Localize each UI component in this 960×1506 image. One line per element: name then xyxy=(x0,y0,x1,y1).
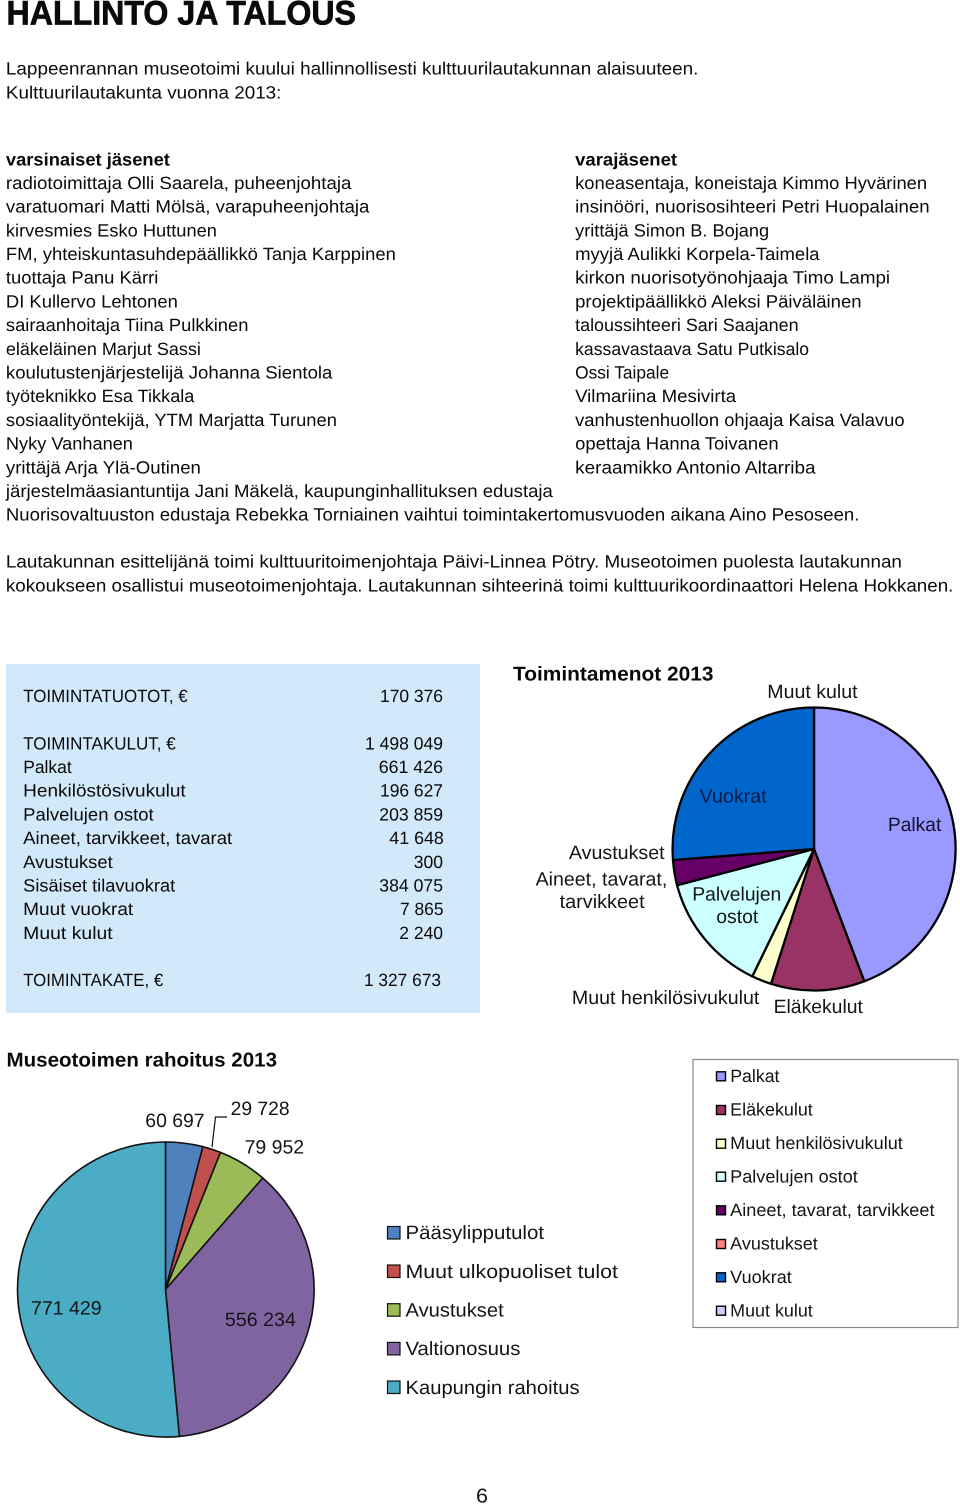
slice: Palkat xyxy=(814,707,956,981)
legend: Museotoimen rahoitus: Muut ulkopuoliset tulot xyxy=(406,1262,619,1283)
panel: financial table: Aineet, tarvikkeet, tavarat xyxy=(23,828,232,848)
pie chart labels: Toimintamenot: tarvikkeet xyxy=(560,892,645,913)
pie chart labels: Museotoimen rahoitus: 60 697 xyxy=(145,1111,205,1132)
slice: Pääsylipputulot xyxy=(166,1142,203,1290)
pie chart labels: Toimintamenot: Palvelujen xyxy=(692,885,781,906)
pie chart labels: Museotoimen rahoitus xyxy=(31,1099,304,1331)
panel: financial table: TOIMINTAKATE, € xyxy=(23,970,163,990)
panel: financial table: 384 075 xyxy=(379,876,443,896)
heading: varajäsenet: varajäsenet xyxy=(575,149,677,169)
text block: presenters: Lautakunnan esittelijänä toimi kulttuuritoimenjohtaja Päivi-Linnea Pötry. Museotoimen puolesta lautakunnan xyxy=(6,552,902,572)
members list: varsinaiset jäsenet: eläkeläinen Marjut Sassi xyxy=(6,339,201,359)
pie chart labels: Toimintamenot: Eläkekulut xyxy=(774,997,864,1018)
panel: financial table: 41 648 xyxy=(389,828,444,848)
intro text: Lappeenrannan museotoimi kuului hallinnollisesti kulttuurilautakunnan alaisuuteen. xyxy=(6,59,698,79)
members list: varsinaiset jäsenet: sairaanhoitaja Tiina Pulkkinen xyxy=(6,315,248,335)
slice: Muut ulkopuoliset tulot xyxy=(166,1147,220,1290)
members list: varsinaiset jäsenet: radiotoimittaja Olli Saarela, puheenjohtaja xyxy=(6,173,352,193)
slice: Palvelujen ostot xyxy=(677,849,814,976)
panel: financial table: Palkat xyxy=(23,757,72,777)
pie chart labels: Toimintamenot xyxy=(536,682,942,1018)
members list: varajäsenet: Ossi Taipale xyxy=(575,362,669,382)
panel: financial table: 2 240 xyxy=(399,923,443,943)
pie chart labels: Museotoimen rahoitus: 79 952 xyxy=(245,1138,304,1158)
members list: varajäsenet: Vilmariina Mesivirta xyxy=(575,386,736,406)
members list: varsinaiset jäsenet: DI Kullervo Lehtonen xyxy=(6,291,178,311)
members list: varajäsenet: koneasentaja, koneistaja Kimmo Hyvärinen xyxy=(575,173,927,193)
members list: varajäsenet xyxy=(575,149,930,477)
legend: Toimintamenot: Eläkekulut xyxy=(730,1099,813,1119)
slice: Eläkekulut xyxy=(771,849,864,991)
intro text xyxy=(6,59,698,102)
slice: Valtionosuus xyxy=(166,1178,314,1436)
heading: Museotoimen rahoitus 2013: Museotoimen rahoitus 2013 xyxy=(6,1049,277,1071)
pie chart labels: Toimintamenot: Palkat xyxy=(888,815,942,836)
slice: Kaupungin rahoitus xyxy=(18,1142,179,1437)
pie chart labels: Museotoimen rahoitus: 771 429 xyxy=(31,1298,102,1320)
panel: financial table: 661 426 xyxy=(379,757,443,777)
legend: Museotoimen rahoitus: Avustukset xyxy=(406,1300,504,1322)
slice: Muut henkilösivukulut xyxy=(752,849,814,984)
panel: financial table: TOIMINTATUOTOT, € xyxy=(23,686,188,706)
leader line: 29 728 xyxy=(212,1117,227,1147)
slice: Aineet, tavarat, tarvikkeet xyxy=(673,849,814,885)
legend: Toimintamenot: Avustukset xyxy=(730,1233,818,1253)
slice: Avustukset xyxy=(166,1152,263,1290)
legend: Toimintamenot: Aineet, tavarat, tarvikkeet xyxy=(730,1200,935,1220)
pie chart labels: Toimintamenot: Aineet, tavarat, xyxy=(536,870,667,891)
panel: financial table: TOIMINTAKULUT, € xyxy=(23,733,176,753)
members list: varajäsenet: keraamikko Antonio Altarriba xyxy=(575,457,816,477)
members list: varajäsenet: myyjä Aulikki Korpela-Taimela xyxy=(575,244,820,264)
heading: Toimintamenot 2013: Toimintamenot 2013 xyxy=(513,663,714,685)
members list: varsinaiset jäsenet: varatuomari Matti Mölsä, varapuheenjohtaja xyxy=(6,197,370,217)
legend: Toimintamenot: Muut kulut xyxy=(730,1300,813,1320)
panel: financial table: 203 859 xyxy=(379,804,443,824)
members list: varsinaiset jäsenet: työteknikko Esa Tikkala xyxy=(6,386,195,406)
pie chart labels: Museotoimen rahoitus: 29 728 xyxy=(231,1099,290,1120)
panel: financial table: Henkilöstösivukulut xyxy=(23,781,186,801)
members list: varajäsenet: yrittäjä Simon B. Bojang xyxy=(575,220,769,240)
members list: varajäsenet: taloussihteeri Sari Saajanen xyxy=(575,315,799,335)
legend: Museotoimen rahoitus: Kaupungin rahoitus xyxy=(406,1378,580,1399)
panel: financial table: 196 627 xyxy=(380,781,443,801)
panel: financial table: 1 498 049 xyxy=(365,733,443,753)
members list: varsinaiset jäsenet: yrittäjä Arja Ylä-Outinen xyxy=(6,457,201,477)
members list: varsinaiset jäsenet: kirvesmies Esko Huttunen xyxy=(6,220,217,240)
pie chart labels: Toimintamenot: Muut henkilösivukulut xyxy=(572,988,760,1009)
text block: presenters xyxy=(6,552,953,596)
members list: varajäsenet: opettaja Hanna Toivanen xyxy=(575,434,779,454)
panel: financial table: Muut vuokrat xyxy=(23,899,133,919)
legend: Museotoimen rahoitus xyxy=(388,1223,619,1399)
members list: varajäsenet: vanhustenhuollon ohjaaja Kaisa Valavuo xyxy=(575,410,905,430)
members list: varsinaiset jäsenet: tuottaja Panu Kärri xyxy=(6,268,158,288)
legend: Toimintamenot: Palkat xyxy=(730,1066,780,1086)
text block: presenters: kokoukseen osallistui museotoimenjohtaja. Lautakunnan sihteerinä toimi kulttuurikoordinaattori Helena Hokkanen. xyxy=(6,576,953,596)
members list: varsinaiset jäsenet: koulutustenjärjestelijä Johanna Sientola xyxy=(6,362,333,382)
pie chart labels: Toimintamenot: Avustukset xyxy=(569,843,665,864)
pie chart: Museotoimen rahoitus xyxy=(18,1142,314,1437)
intro text: Kulttuurilautakunta vuonna 2013: xyxy=(6,82,281,102)
members list: varsinaiset jäsenet: järjestelmäasiantuntija Jani Mäkelä, kaupunginhallituksen edustaja xyxy=(5,481,553,501)
members list: varsinaiset jäsenet: Nyky Vanhanen xyxy=(6,434,133,454)
legend: Museotoimen rahoitus: Valtionosuus xyxy=(406,1339,520,1360)
pie chart labels: Museotoimen rahoitus: 556 234 xyxy=(225,1310,296,1331)
pie chart labels: Toimintamenot: Muut kulut xyxy=(767,682,858,703)
legend: Toimintamenot xyxy=(693,1060,958,1328)
members list: varsinaiset jäsenet: FM, yhteiskuntasuhdepäällikkö Tanja Karppinen xyxy=(6,244,396,264)
members list: varajäsenet: kirkon nuorisotyönohjaaja Timo Lampi xyxy=(575,268,890,288)
panel: financial table: Muut kulut xyxy=(23,923,113,943)
pie chart labels: Toimintamenot: ostot xyxy=(716,907,759,928)
members list: varsinaiset jäsenet xyxy=(5,149,859,525)
members list: varajäsenet: projektipäällikkö Aleksi Päiväläinen xyxy=(575,291,862,311)
slice: Vuokrat xyxy=(673,708,814,860)
panel: financial table: 170 376 xyxy=(380,686,443,706)
pie chart labels: Toimintamenot: Vuokrat xyxy=(700,786,767,807)
panel: financial table xyxy=(6,664,480,1013)
panel: financial table: Avustukset xyxy=(23,852,113,872)
members list: varsinaiset jäsenet: sosiaalityöntekijä, YTM Marjatta Turunen xyxy=(6,410,337,430)
panel: financial table: 300 xyxy=(414,852,443,872)
panel: financial table: 7 865 xyxy=(400,899,444,919)
pie chart: Toimintamenot xyxy=(673,707,956,991)
panel: financial table: 1 327 673 xyxy=(364,970,441,990)
members list: varajäsenet: kassavastaava Satu Putkisalo xyxy=(575,339,809,359)
heading: varsinaiset jäsenet: varsinaiset jäsenet xyxy=(6,149,170,169)
members list: varsinaiset jäsenet: Nuorisovaltuuston edustaja Rebekka Torniainen vaihtui toimintakertomusvuoden aikana Aino Pesoseen. xyxy=(6,505,859,525)
legend: Toimintamenot: Vuokrat xyxy=(730,1267,792,1287)
legend: Museotoimen rahoitus: Pääsylipputulot xyxy=(406,1223,545,1244)
legend: Toimintamenot: Muut henkilösivukulut xyxy=(730,1133,903,1153)
legend: Toimintamenot: Palvelujen ostot xyxy=(730,1166,858,1186)
members list: varajäsenet: insinööri, nuorisosihteeri Petri Huopalainen xyxy=(575,197,930,217)
panel: financial table: Palvelujen ostot xyxy=(23,804,154,824)
panel: financial table: Sisäiset tilavuokrat xyxy=(23,876,175,896)
